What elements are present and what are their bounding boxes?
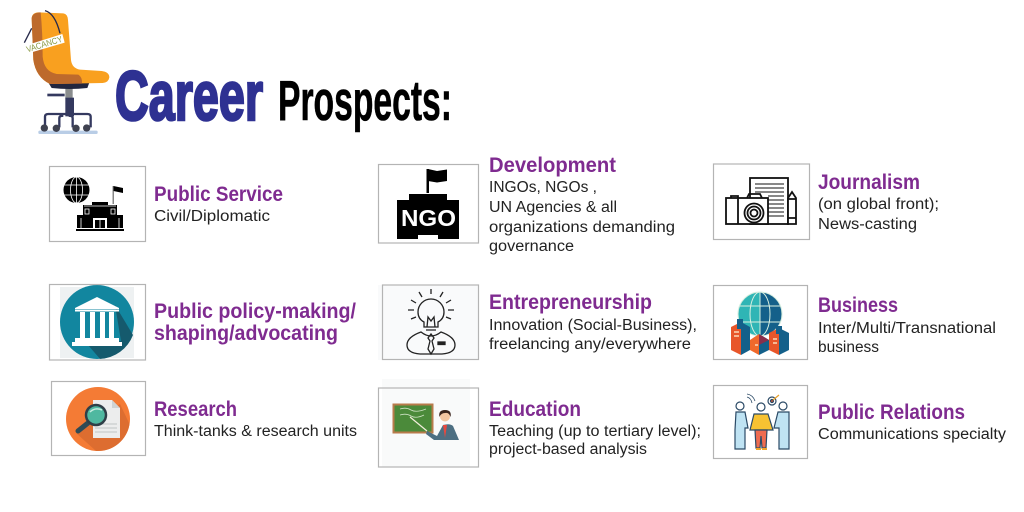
- icon: globe and government building: [64, 177, 124, 231]
- panel: education: [378, 379, 705, 467]
- heading: Business: [818, 294, 898, 317]
- description: organizations demanding: [489, 219, 675, 236]
- icon: light bulb person: [407, 289, 455, 354]
- icon: people communicating: [735, 394, 789, 449]
- icon frame: [714, 386, 808, 458]
- panel: business: [714, 286, 1000, 360]
- panel: public service: [50, 166, 283, 242]
- description: Innovation (Social-Business),: [489, 317, 697, 334]
- panel: journalism: [714, 164, 943, 240]
- heading: Public Service: [154, 183, 283, 206]
- icon frame: [382, 285, 478, 360]
- heading: Public Relations: [818, 401, 965, 424]
- heading: Public policy-making/: [154, 300, 356, 323]
- icon: camera, document and pencil: [726, 178, 796, 224]
- description: News-casting: [818, 216, 917, 233]
- heading: Entrepreneurship: [489, 291, 652, 314]
- icon: magnifier on document: [66, 387, 130, 451]
- icon: vacant office chair: [24, 11, 109, 134]
- icon frame: [50, 284, 146, 360]
- title word: Career: Career: [115, 57, 263, 135]
- icon: teacher at chalkboard: [382, 379, 470, 467]
- panel: research: [52, 382, 357, 456]
- description: freelancing any/everywhere: [489, 336, 691, 353]
- description: UN Agencies & all: [489, 199, 617, 216]
- heading: Research: [154, 398, 237, 421]
- description: (on global front);: [818, 196, 939, 213]
- icon frame: [52, 382, 146, 456]
- title word: Prospects: Prospects:: [278, 69, 452, 133]
- heading: Education: [489, 398, 581, 421]
- title: [115, 57, 452, 135]
- description: Teaching (up to tertiary level);: [489, 423, 701, 440]
- heading: Development: [489, 154, 616, 177]
- description: project-based analysis: [489, 441, 647, 458]
- description: INGOs, NGOs ,: [489, 179, 597, 196]
- panel: public policy: [50, 284, 356, 360]
- icon frame: [50, 166, 146, 242]
- icon frame: [378, 164, 478, 243]
- icon background: [378, 285, 478, 360]
- panel: entrepreneurship: [378, 285, 701, 360]
- icon frame: [714, 286, 808, 360]
- icon: NGO building: [397, 169, 459, 239]
- description: Communications specialty: [818, 426, 1006, 443]
- icon: institution building: [60, 285, 134, 359]
- icon frame: [378, 388, 478, 467]
- description: governance: [489, 238, 574, 255]
- description: business: [818, 339, 879, 356]
- icon: globe and buildings: [731, 292, 789, 355]
- icon: NGO building: NGO: [401, 205, 456, 231]
- heading: Journalism: [818, 171, 920, 194]
- description: Inter/Multi/Transnational: [818, 320, 996, 337]
- panel: public relations: [714, 386, 1006, 458]
- heading second line: shaping/advocating: [154, 322, 338, 345]
- description: Think-tanks & research units: [154, 423, 357, 440]
- panel: development: [378, 154, 679, 255]
- icon: vacant office chair: VACANCY: [25, 34, 64, 54]
- description: Civil/Diplomatic: [154, 208, 270, 225]
- icon frame: [714, 164, 810, 240]
